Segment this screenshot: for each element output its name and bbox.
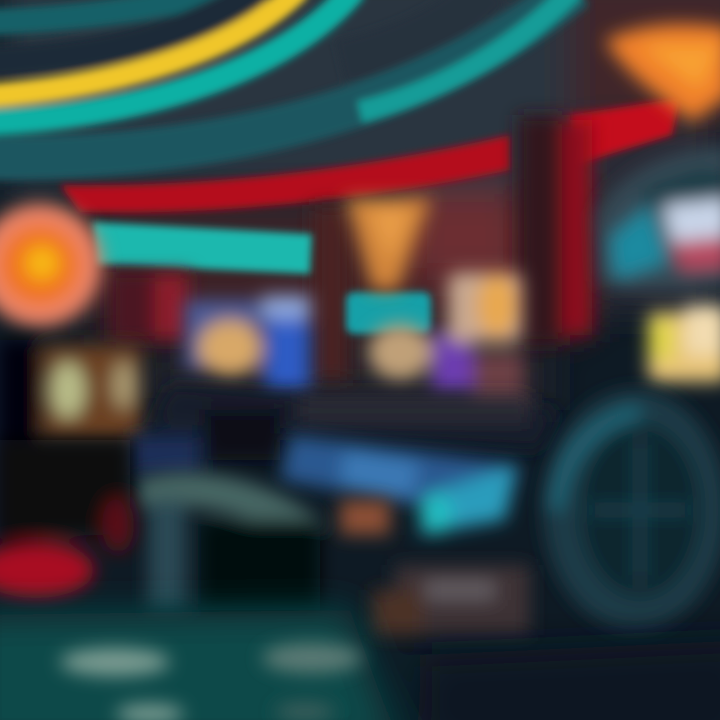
left red panel (110, 272, 190, 342)
left slot machine (0, 340, 142, 560)
left seated figure (135, 472, 325, 610)
right circular wheel (543, 390, 720, 630)
center pillar (312, 205, 350, 380)
right screen monitor (596, 145, 720, 290)
ceiling arcs (0, 0, 575, 158)
green felt table (0, 610, 720, 720)
slot screens (185, 272, 524, 414)
teal signage (92, 222, 431, 334)
red ceiling band (60, 98, 680, 213)
table chips and clutter (340, 500, 530, 635)
orange glowing disc (0, 203, 102, 327)
blue table screen (280, 435, 520, 535)
dark central counter (130, 385, 560, 475)
playing cards on table (60, 643, 362, 720)
red chair (0, 440, 134, 598)
hanging lamp (345, 198, 432, 290)
upper wall (0, 0, 720, 410)
right lower glowing screen (648, 305, 720, 382)
orange ceiling lamp (605, 24, 720, 122)
red pillar right (518, 115, 592, 345)
